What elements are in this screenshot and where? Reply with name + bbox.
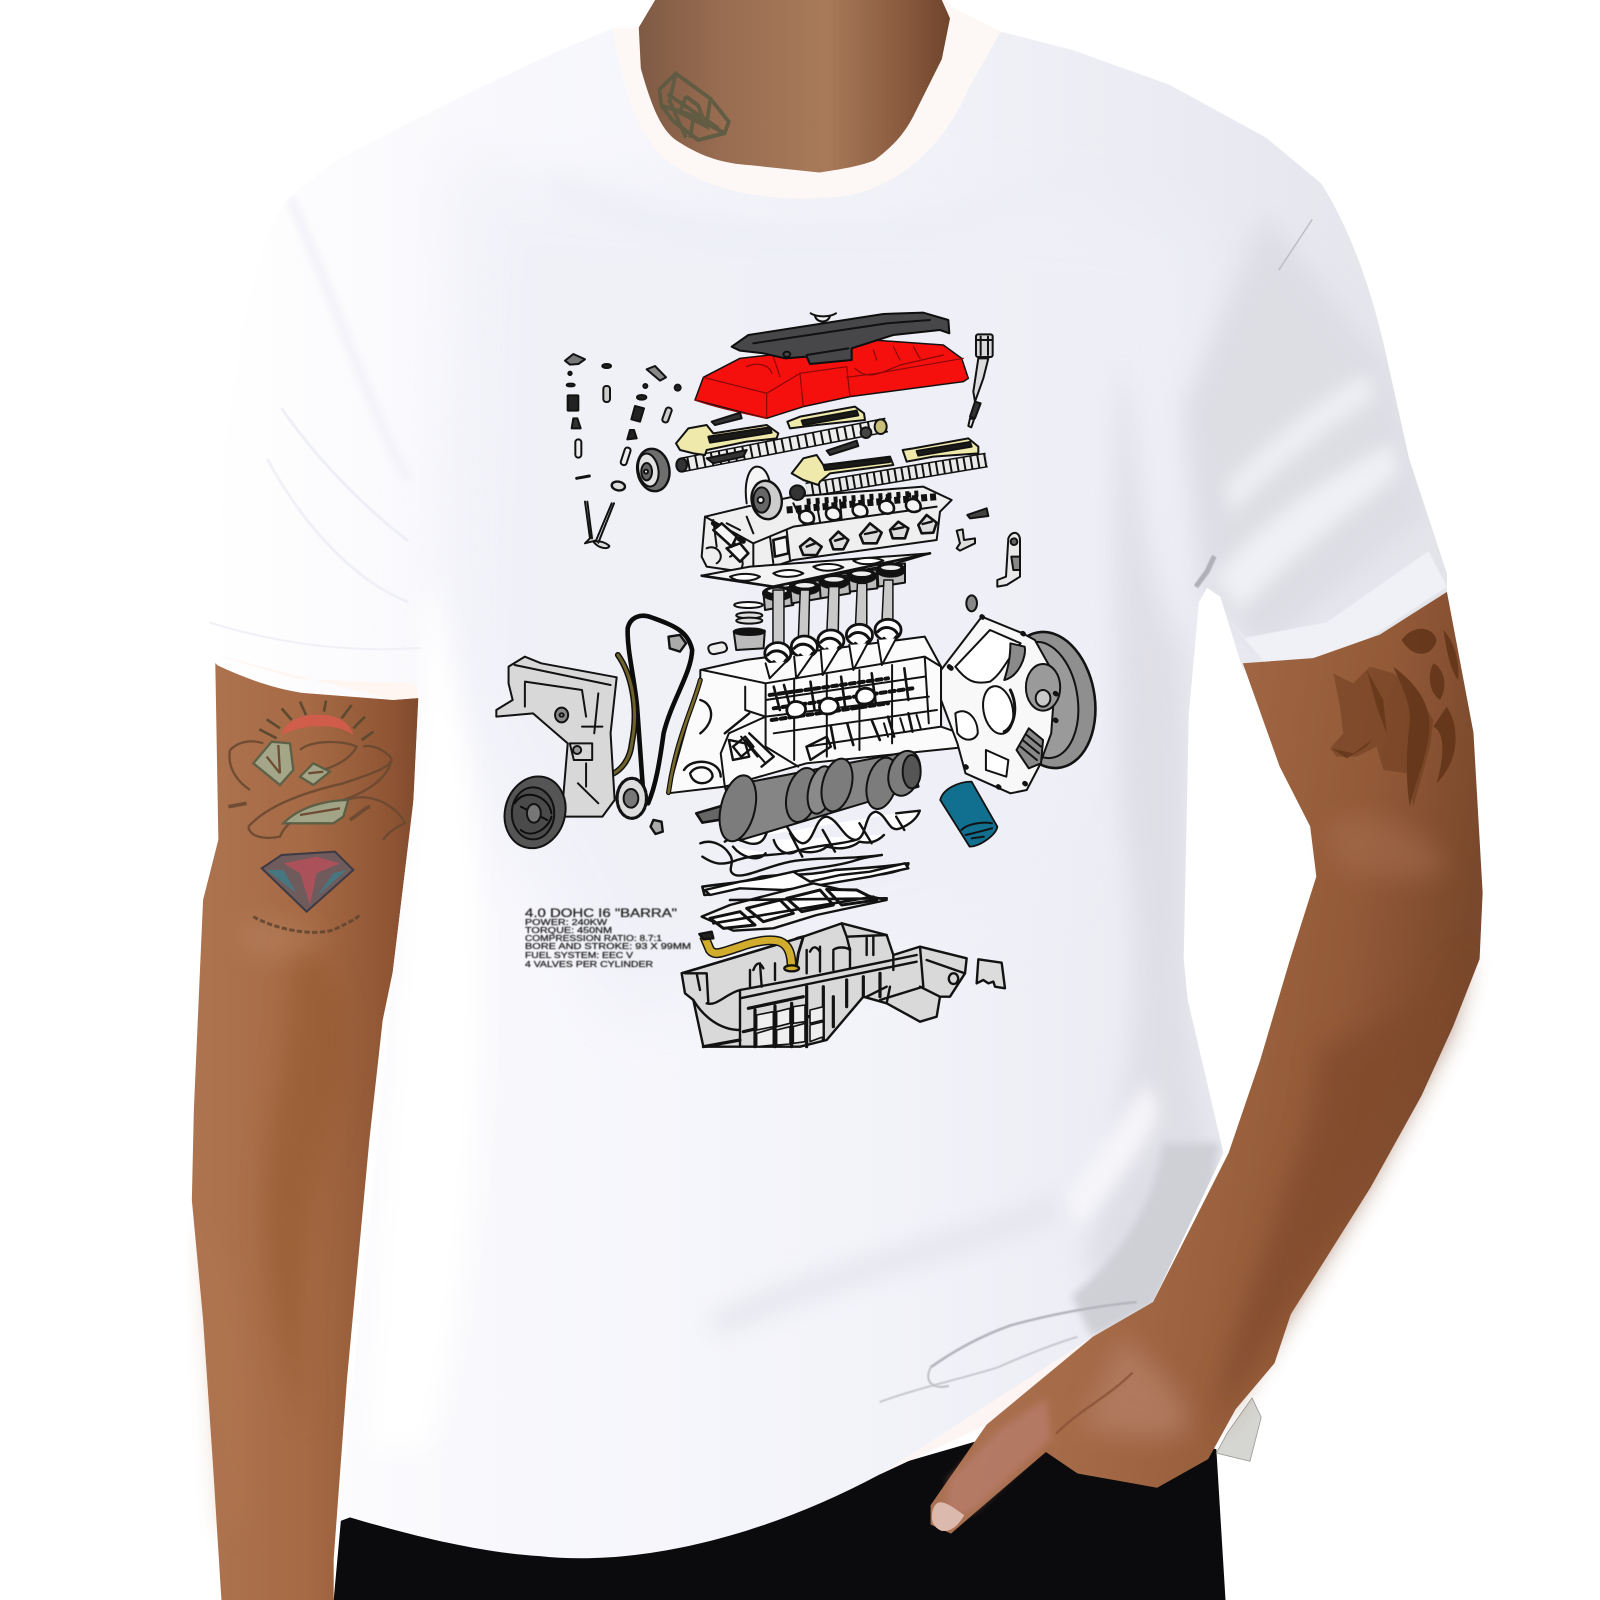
tensioner <box>668 635 686 652</box>
tattoo sun <box>259 701 373 740</box>
valve cover red <box>695 340 968 418</box>
cam sprocket <box>634 446 673 494</box>
piston rings and spare piston <box>707 602 765 655</box>
engine specs text block <box>525 908 691 969</box>
ignition coil <box>968 334 993 427</box>
crank sprocket <box>617 778 663 834</box>
timing cover <box>496 657 617 817</box>
t-shirt body and sleeves <box>206 0 1447 1558</box>
oil filter <box>940 782 997 847</box>
specs title: 4.0 DOHC I6 "BARRA" <box>525 908 677 920</box>
left arm <box>192 663 422 1600</box>
right arm and hand <box>931 592 1483 1534</box>
sump pan <box>682 923 967 1047</box>
tattoo diamond <box>262 852 353 912</box>
connecting rods <box>773 580 893 645</box>
spec: compression: COMPRESSION RATIO: 8.7:1 <box>525 934 663 943</box>
cam caps yellow <box>676 407 978 485</box>
pants <box>334 1429 1226 1600</box>
spec: power: POWER: 240KW <box>525 918 608 927</box>
tattoo: left arm sun, banner and diamond <box>228 701 405 932</box>
timing chain <box>628 616 692 804</box>
engine: upper exploded parts <box>565 313 1020 611</box>
spec: torque: TORQUE: 450NM <box>525 926 612 935</box>
camshaft intake <box>676 413 887 472</box>
shirt shading: chest and folds <box>490 227 516 744</box>
valves <box>585 502 614 548</box>
tattoo: right arm wolf <box>1330 629 1459 807</box>
engine: sump assembly <box>682 855 1005 1047</box>
spec: valves: 4 VALVES PER CYLINDER <box>525 960 653 969</box>
tattoo banner with gems <box>228 741 405 840</box>
chain guide <box>613 655 635 774</box>
engine block <box>668 619 970 793</box>
crankshaft <box>696 749 924 844</box>
oil filler cap <box>811 313 836 321</box>
flywheel <box>995 628 1103 772</box>
head gasket <box>702 553 930 587</box>
tattoo: neck gem <box>659 73 729 140</box>
lower crankcase net gasket <box>705 855 882 892</box>
backing plate <box>941 617 1060 793</box>
engine: block, timing, crank, flywheel <box>496 580 1103 895</box>
sump small plate <box>977 959 1005 988</box>
sleeve seam <box>1279 219 1312 270</box>
head bolts and brackets right <box>957 508 1020 611</box>
spec: bore and stroke: BORE AND STROKE: 93 X 99MM <box>525 942 691 951</box>
camshaft exhaust <box>792 460 987 500</box>
baffle plate gasket <box>702 883 887 931</box>
shirt collar band <box>612 0 1001 199</box>
oil pickup tube <box>699 932 803 971</box>
bearing caps <box>725 811 920 858</box>
engine top cover dark <box>732 313 949 364</box>
t-shirt tail behind wrist <box>1216 1398 1261 1461</box>
cylinder head <box>702 467 952 573</box>
lower gaskets <box>700 840 882 876</box>
valve train small parts left <box>565 354 681 491</box>
tattoo script <box>253 915 360 932</box>
crank pulley <box>499 773 571 851</box>
neck <box>639 0 950 172</box>
spec: fuel system: FUEL SYSTEM: EEC V <box>525 951 634 960</box>
front timing guide <box>668 680 700 793</box>
pistons <box>763 563 905 610</box>
thumbnail <box>932 1502 964 1531</box>
